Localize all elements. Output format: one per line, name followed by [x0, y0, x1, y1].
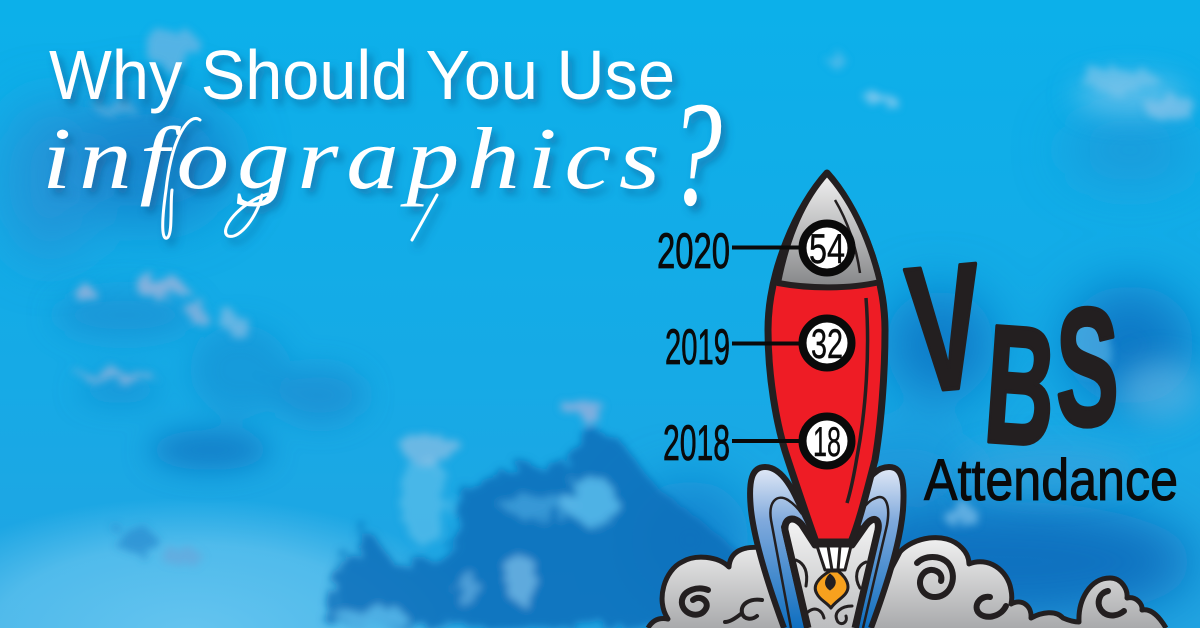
smoke swirls [682, 557, 1124, 622]
script flourishes [163, 118, 437, 240]
body highlight line [847, 298, 868, 503]
left booster fin [750, 467, 812, 628]
VBS heading: S [1056, 273, 1119, 461]
rocket [750, 173, 904, 628]
data row: 2019 = 32: 32 [811, 320, 843, 367]
nose highlight line [835, 200, 860, 273]
exhaust nozzle [817, 546, 851, 570]
data row: 2020 = 54: 54 [809, 225, 845, 272]
exhaust curls [796, 560, 866, 624]
smoke clouds [648, 538, 1166, 628]
right booster fin [845, 467, 904, 628]
title question mark: ? [668, 71, 722, 237]
engine cavity [785, 519, 878, 628]
VBS heading: B [980, 289, 1062, 481]
rocket body [768, 173, 885, 542]
rocket nose cone [778, 173, 880, 287]
data row: 2020 = 54: 2020 [657, 223, 730, 279]
flame [815, 571, 848, 608]
title [42, 36, 722, 240]
year connector lines [732, 248, 805, 441]
data row: 2020 = 54 [657, 223, 852, 279]
VBS heading [900, 226, 1119, 481]
title line: Why Should You Use: Why Should You Use [49, 36, 675, 114]
data row: 2018 = 18: 18 [813, 418, 841, 465]
data row: 2018 = 18: 2018 [663, 415, 730, 471]
fin inlay lines [770, 497, 888, 628]
left smoke cloud [648, 547, 800, 628]
VBS heading: V [900, 226, 991, 430]
right smoke cloud [860, 538, 1166, 628]
data row: 2019 = 32 [665, 318, 852, 375]
title line: infographics: infographics [42, 110, 660, 208]
data row: 2018 = 18 [663, 415, 852, 471]
data row: 2019 = 32: 2019 [665, 319, 730, 375]
